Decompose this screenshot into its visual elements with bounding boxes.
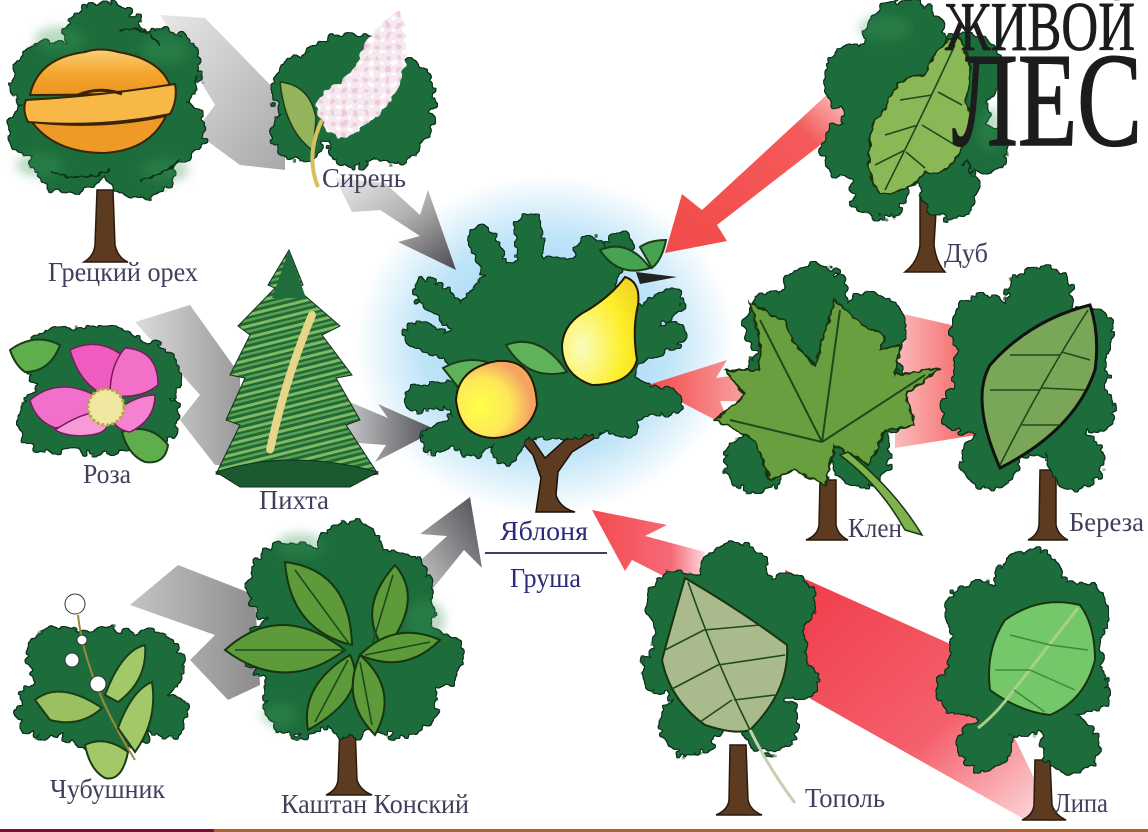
icon: lilac flower <box>280 10 407 187</box>
tree: walnut <box>9 3 205 262</box>
tree: maple <box>715 265 940 540</box>
arrow: poplar to apple-pear <box>592 510 705 592</box>
label: poplar: Тополь <box>805 783 885 813</box>
tree: mock-orange <box>17 594 187 778</box>
icon: apple <box>456 361 537 438</box>
icon: linden leaf <box>978 602 1095 728</box>
label: horse chestnut: Каштан Конский <box>281 789 469 819</box>
icon: maple leaf <box>715 300 940 535</box>
icon: rose flower <box>10 340 168 462</box>
icon: oak leaf <box>868 36 973 194</box>
label: lilac: Сирень <box>322 163 406 193</box>
arrow: maple to apple-pear <box>648 360 775 428</box>
heading: apple and pear: Яблоня <box>500 516 588 546</box>
icon: chestnut leaf <box>225 562 440 735</box>
label: rose: Роза <box>83 459 131 489</box>
tree: lilac <box>272 10 435 187</box>
band: birch to maple <box>895 312 995 448</box>
leaves <box>443 360 487 387</box>
label: linden: Липа <box>1054 788 1108 818</box>
tree: birch <box>942 267 1115 540</box>
tree: oak <box>822 0 1008 272</box>
tree: poplar <box>642 542 818 815</box>
icon: mock-orange sprig <box>35 594 153 778</box>
arrow: walnut to lilac <box>160 15 285 170</box>
label: mock-orange: Чубушник <box>50 774 166 804</box>
tree: linden <box>937 550 1110 820</box>
label: birch: Береза <box>1069 507 1144 537</box>
icon: walnut <box>24 50 176 153</box>
arrow: rose to fir <box>135 305 240 465</box>
band: linden to poplar <box>785 570 1055 822</box>
heading: apple and pear <box>485 516 607 593</box>
icon: birch leaf <box>982 305 1097 468</box>
label: fir: Пихта <box>259 485 329 515</box>
bottom strip <box>0 829 1148 832</box>
heading: apple and pear: Груша <box>510 563 581 593</box>
icon: poplar leaf <box>662 578 795 803</box>
central tree: apple and pear <box>418 228 677 512</box>
arrow: lilac to apple-pear <box>335 178 456 270</box>
arrow: mock-orange to chestnut <box>130 565 260 700</box>
tree: rose <box>10 326 180 462</box>
icon: fir needle stem <box>270 315 312 450</box>
arrow: fir to apple-pear <box>345 400 437 462</box>
tree: horse chestnut <box>225 522 463 795</box>
tree: fir <box>216 250 378 487</box>
arrow: chestnut to apple-pear <box>410 497 482 602</box>
arrow: oak to apple-pear <box>665 78 850 253</box>
label: walnut: Грецкий орех <box>48 257 198 287</box>
label: maple: Клен <box>848 513 902 543</box>
background glow behind central tree <box>355 175 735 515</box>
crown <box>418 228 672 450</box>
label: oak: Дуб <box>944 238 988 268</box>
icon: pear <box>562 277 638 385</box>
